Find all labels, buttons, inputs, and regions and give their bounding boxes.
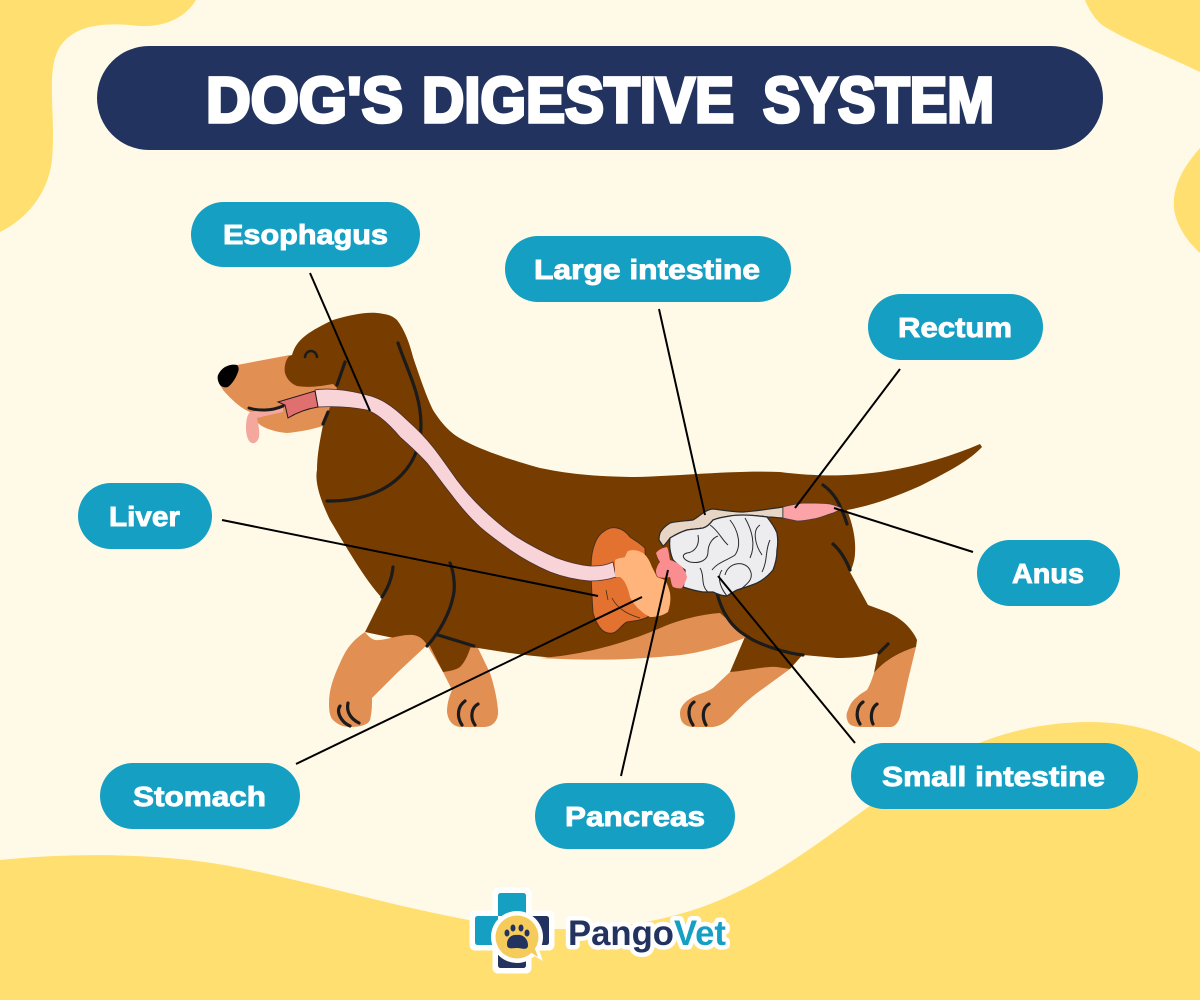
label: Esophagus: Esophagus	[223, 219, 388, 250]
label: Large intestine	[505, 236, 791, 302]
label: Pancreas	[535, 783, 735, 849]
organ: large intestine	[659, 507, 783, 546]
label: Liver: Liver	[109, 501, 180, 532]
title: SYSTEM	[763, 64, 994, 136]
organ: stomach	[615, 550, 670, 617]
label: Pancreas: Pancreas	[565, 801, 705, 832]
label: Anus: Anus	[1012, 558, 1084, 589]
far front leg	[427, 645, 498, 727]
organ: pancreas	[656, 547, 687, 588]
nose	[218, 365, 239, 387]
organ: small intestine	[670, 515, 778, 596]
label: Small intestine	[851, 743, 1138, 809]
near front leg	[329, 632, 427, 727]
label: Rectum	[868, 294, 1043, 360]
logo: PangoVet	[475, 893, 726, 968]
label: Rectum: Rectum	[898, 312, 1012, 343]
leader lines	[222, 273, 973, 776]
near rear leg	[846, 647, 916, 727]
far rear leg	[680, 660, 790, 727]
label: Anus	[977, 540, 1120, 606]
belly	[540, 613, 747, 660]
label: Stomach	[100, 763, 300, 829]
title: DIGESTIVE	[422, 64, 734, 136]
label: Stomach: Stomach	[133, 781, 266, 812]
eye	[305, 351, 317, 357]
label: Liver	[78, 483, 212, 549]
label: Large intestine: Large intestine	[534, 254, 760, 285]
organ: rectum	[783, 503, 842, 521]
body contour lines	[323, 343, 888, 726]
tongue	[246, 407, 283, 443]
organ: liver	[591, 528, 648, 633]
muzzle	[220, 355, 337, 433]
mouth	[249, 406, 283, 410]
body	[275, 313, 982, 673]
icon: cross with paw	[475, 893, 549, 968]
illustration: dog	[218, 313, 982, 727]
title: DOG'S	[206, 64, 403, 136]
label: Small intestine: Small intestine	[882, 761, 1105, 792]
organ: esophagus	[278, 389, 616, 581]
wordmark: PangoVet	[568, 914, 726, 953]
title	[97, 46, 1103, 150]
label: Esophagus	[191, 202, 420, 267]
